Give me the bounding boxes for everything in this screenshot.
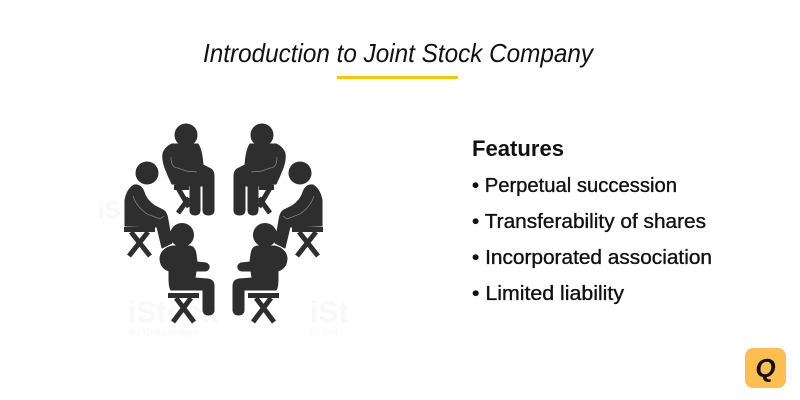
features list — [472, 136, 712, 305]
illustration: people sitting in a circle — [98, 124, 348, 337]
icon: Q logo — [745, 348, 786, 388]
person: lower right — [233, 224, 287, 322]
watermark text: by Get — [310, 327, 338, 337]
person: upper left — [163, 124, 214, 215]
feature: incorporated association: • Incorporated association — [472, 247, 712, 269]
features heading: Features — [472, 136, 564, 161]
watermark text: by Getty Images — [130, 327, 200, 337]
title underline — [337, 76, 458, 79]
title: Introduction to Joint Stock Company — [203, 38, 595, 68]
person: middle left — [124, 162, 172, 256]
icon: Q logo: Q — [755, 353, 776, 383]
feature: transferability of shares: • Transferability of shares — [472, 211, 706, 233]
watermark text: iStock — [128, 296, 218, 329]
person: middle right — [275, 162, 323, 256]
person: upper right — [234, 124, 285, 215]
watermark text — [98, 197, 348, 337]
feature: limited liability: • Limited liability — [472, 283, 624, 305]
watermark text: iSt — [310, 296, 348, 329]
watermark text: iSt — [98, 197, 129, 224]
feature: perpetual succession: • Perpetual succession — [472, 175, 677, 197]
person: lower left — [160, 224, 214, 322]
